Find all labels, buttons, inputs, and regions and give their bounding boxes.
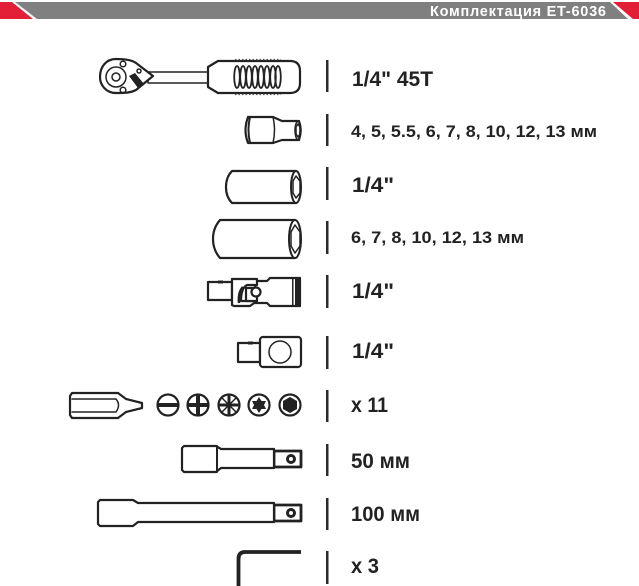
icon: pozidriv tip <box>218 394 240 416</box>
icon: hex key <box>238 552 301 586</box>
icon: 50 mm extension <box>182 446 301 472</box>
label: hex key count: x 3 <box>351 555 379 578</box>
label: 100 mm: 100 мм <box>351 503 420 526</box>
label: deep socket sizes: 6, 7, 8, 10, 12, 13 мм <box>351 228 524 247</box>
icon: torx tip <box>248 394 270 416</box>
header banner <box>0 2 639 20</box>
icon: bit <box>70 393 142 418</box>
label: adapter size: 1/4" <box>352 340 394 363</box>
row: deep socket <box>213 220 524 258</box>
icon: short socket <box>246 117 301 143</box>
label: bit count: x 11 <box>351 394 388 417</box>
icon: adapter <box>238 337 301 367</box>
label: ratchet size: 1/4" 45T <box>352 68 433 91</box>
row: adapter <box>238 336 394 369</box>
icon: 100 mm extension <box>98 500 301 526</box>
row: universal joint <box>208 275 394 308</box>
icon: ratchet <box>100 59 300 94</box>
header title: Комплектация ET-6036 <box>430 4 606 20</box>
icon: phillips tip <box>188 394 208 416</box>
icon: universal joint <box>208 278 300 306</box>
row: hex keys <box>238 551 379 586</box>
row: ratchet <box>100 59 433 94</box>
icon: hex tip <box>280 394 300 416</box>
row: 100 mm extension <box>98 498 420 530</box>
row: medium socket <box>226 167 394 203</box>
row: 50 mm extension <box>182 444 410 476</box>
label: short socket sizes: 4, 5, 5.5, 6, 7, 8, 10, 12, 13 мм <box>351 122 597 141</box>
icon: slotted tip <box>158 394 178 416</box>
icon: deep socket <box>213 220 301 258</box>
label: 50 mm: 50 мм <box>351 450 410 473</box>
label: medium socket size: 1/4" <box>352 174 394 197</box>
icon: medium socket <box>226 171 301 203</box>
row: bits <box>70 390 388 422</box>
row: short sockets <box>246 114 597 146</box>
label: universal joint size: 1/4" <box>352 280 394 303</box>
grip ribs <box>234 66 281 88</box>
